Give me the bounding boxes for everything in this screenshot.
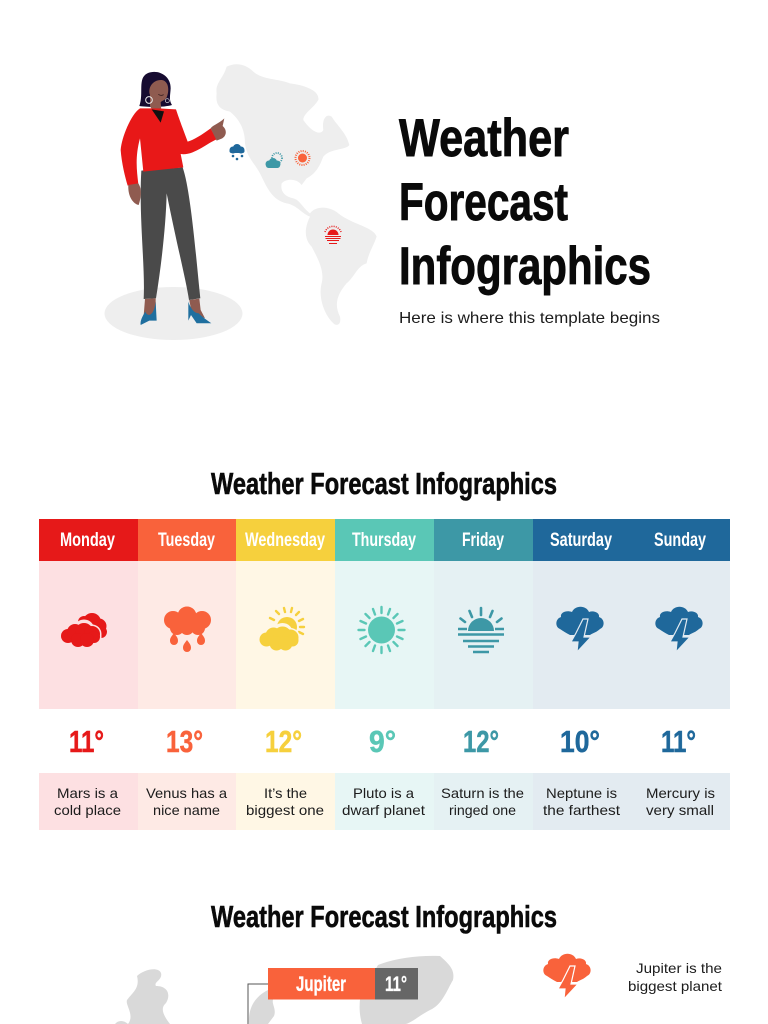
icon: Saturday thunder cloud [556, 607, 604, 652]
description texts [54, 785, 715, 818]
description texts: Mercury is [646, 785, 715, 801]
temperatures row: 11° [69, 724, 104, 759]
table header row: Saturday [550, 530, 612, 551]
table header row: Wednesday [245, 530, 325, 551]
Jupiter description [628, 960, 722, 994]
description texts: dwarf planet [342, 802, 425, 818]
map icon: rain cloud [230, 144, 244, 160]
map icon: sun [296, 151, 310, 165]
icon: Thursday sun [358, 607, 404, 653]
icon: Monday clouds [60, 613, 107, 647]
temperatures row: 13° [166, 724, 203, 759]
icon: Friday sunrise [458, 608, 504, 652]
description texts: very small [646, 802, 714, 818]
temperatures row: 10° [560, 724, 600, 759]
main title [399, 109, 651, 296]
forecast table [39, 519, 730, 830]
label: Jupiter: 11° [385, 973, 407, 996]
description texts: ringed one [449, 802, 516, 818]
map icon: sun and cloud [266, 153, 282, 168]
description texts: Saturn is the [441, 785, 524, 801]
description texts: Mars is a [57, 785, 118, 801]
table header row: Tuesday [158, 530, 215, 551]
description texts: Venus has a [146, 785, 227, 801]
table header row: Monday [60, 530, 115, 551]
table header row: Thursday [352, 530, 416, 551]
description texts: the farthest [543, 802, 620, 818]
section heading: map: Weather Forecast Infographics [211, 899, 557, 934]
temperatures row: 9° [369, 724, 396, 759]
icon: Jupiter thunder cloud [543, 954, 591, 999]
callout line [248, 984, 268, 1024]
label: Jupiter: Jupiter [296, 973, 346, 996]
icon: Wednesday sun behind cloud [258, 608, 304, 650]
temperatures row [69, 724, 696, 759]
description texts: Pluto is a [353, 785, 414, 801]
table header row [39, 519, 730, 561]
label: Jupiter [268, 968, 418, 1000]
ground shadow [104, 287, 242, 340]
Jupiter description: biggest planet [628, 978, 722, 994]
description texts: cold place [54, 802, 121, 818]
Jupiter description: Jupiter is the [636, 960, 722, 976]
description texts: It’s the [264, 785, 307, 801]
section heading: forecast table: Weather Forecast Infographics [211, 466, 557, 501]
description cells background [39, 773, 730, 830]
main title: Forecast [399, 173, 568, 232]
table column tints [39, 561, 730, 709]
main title: Weather [399, 109, 569, 168]
subtitle: Here is where this template begins [399, 310, 660, 327]
map icon: sunset [325, 226, 341, 244]
description texts: Neptune is [546, 785, 617, 801]
woman figure [121, 72, 226, 325]
world map fragment [115, 956, 453, 1024]
temperatures row: 12° [265, 724, 302, 759]
table header row: Friday [462, 530, 504, 551]
illustration: woman presenting weather map [104, 64, 377, 340]
icon: Tuesday rain cloud [164, 606, 211, 652]
description texts: nice name [153, 802, 220, 818]
icon: Sunday thunder cloud [655, 607, 703, 652]
map of the Americas [216, 64, 377, 325]
description texts: biggest one [246, 802, 324, 818]
main title: Infographics [399, 237, 651, 296]
temperatures row: 12° [463, 724, 499, 759]
temperatures row: 11° [661, 724, 696, 759]
table header row: Sunday [654, 530, 706, 551]
